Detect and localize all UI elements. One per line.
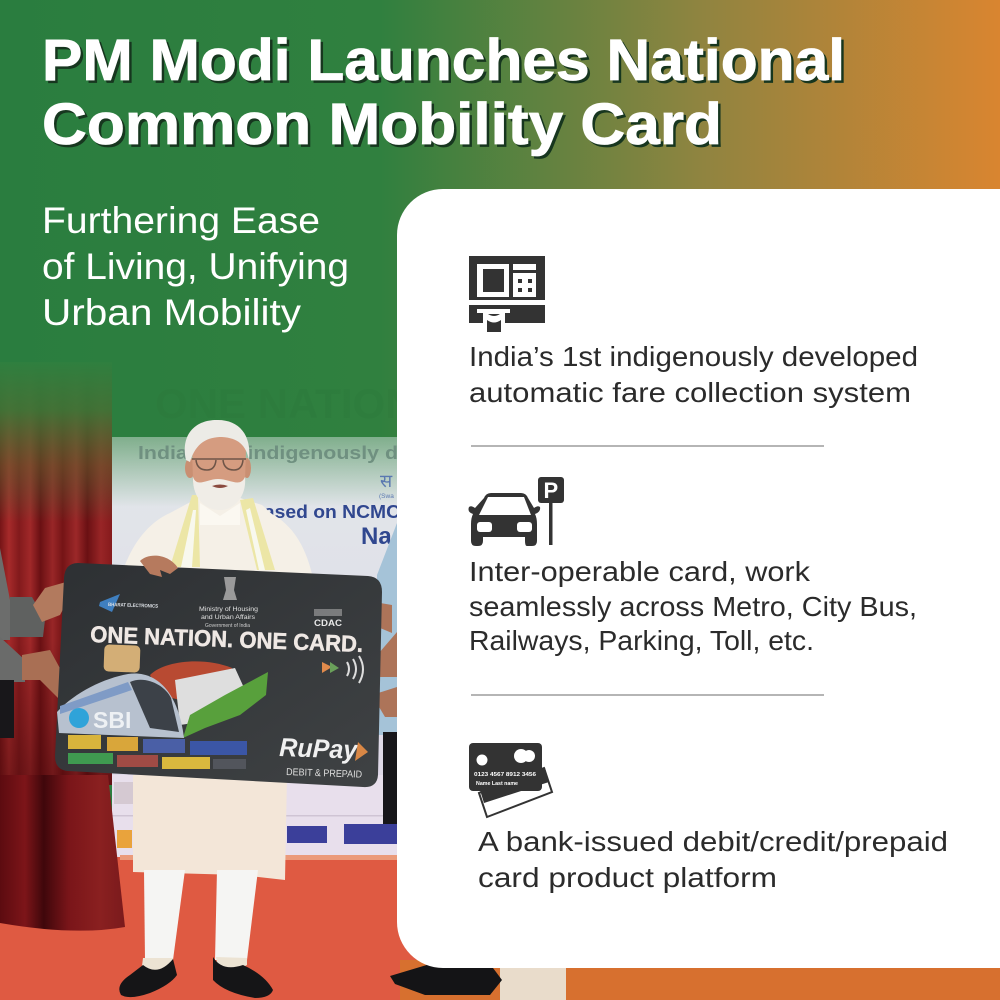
ministry text: Ministry of Housing: [199, 606, 258, 613]
stage backdrop: Na: [361, 523, 392, 550]
icon: bank cards: Name Last name: [476, 781, 518, 787]
title: [42, 28, 848, 160]
right leg: [215, 870, 258, 960]
CDAC logo: CDAC: [314, 618, 342, 629]
stage backdrop: [112, 437, 412, 867]
chip: [104, 644, 140, 673]
PM figure: [119, 420, 312, 998]
panel: key features: [397, 189, 1000, 968]
collar: [200, 503, 240, 525]
left person: [0, 548, 68, 738]
icon: bank cards: 0123 4567 8912 3456: [474, 772, 536, 778]
text: second feature: Railways, Parking, Toll, etc.: [469, 625, 814, 656]
bank logos: [68, 735, 247, 769]
glasses: [192, 459, 246, 470]
title: Common Mobility Card: [44, 94, 724, 160]
left leg: [144, 870, 185, 960]
icon: fare collection machine: [469, 256, 545, 332]
ears: [185, 458, 195, 478]
CDAC logo: [314, 609, 342, 629]
title: PM Modi Launches National: [44, 30, 848, 96]
dark shoes at panel edge: [390, 964, 502, 995]
SBI: [69, 708, 89, 728]
red carpet: [0, 857, 1000, 1000]
right person: [372, 523, 397, 824]
subtitle: of Living, Unifying: [42, 246, 349, 287]
National Common Mobility Card replica: DEBIT & PREPAID: [286, 767, 362, 781]
right shoe: [213, 957, 273, 998]
National Common Mobility Card replica: and Urban Affairs: [201, 614, 256, 621]
stole right: [240, 498, 275, 570]
red curtain lower: [0, 775, 125, 931]
face: [192, 428, 246, 508]
subtitle: [42, 200, 349, 333]
National Common Mobility Card replica: Government of India: [205, 623, 250, 629]
stole left: [170, 495, 200, 567]
National Common Mobility Card replica: BHARAT ELECTRONICS: [108, 602, 159, 610]
text: first feature: automatic fare collection system: [469, 377, 911, 408]
stage backdrop: Based on NCMC: [250, 502, 400, 522]
subtitle: Furthering Ease: [42, 200, 320, 241]
icon: bank cards: [469, 743, 552, 817]
left shoe: [119, 959, 177, 997]
flag splash art: [150, 661, 232, 700]
icon: car and parking sign: P: [544, 478, 558, 503]
kurta upper body: [125, 498, 312, 600]
event photo: [0, 362, 1000, 1000]
stage backdrop: India's 1st indigenously d: [138, 443, 398, 463]
text: second feature: seamlessly across Metro, City Bus,: [469, 591, 917, 622]
text: third feature: card product platform: [478, 862, 777, 893]
kurta lower: [133, 775, 287, 880]
text: third feature: [478, 826, 948, 893]
icon: car and parking sign: [468, 477, 564, 546]
emblem: [223, 577, 237, 600]
bottom carpet strip, right: [400, 960, 1000, 1000]
contactless icon: [322, 662, 332, 673]
text: first feature: India’s 1st indigenously developed: [469, 341, 918, 372]
title: PM Modi Launches National: [42, 28, 845, 93]
text: first feature: [469, 341, 918, 408]
mouth: [212, 484, 228, 488]
stage backdrop: स: [380, 471, 393, 491]
green fade over curtain: [0, 362, 112, 522]
issuer logo: [99, 594, 120, 612]
stage backdrop: (Swa: [379, 493, 394, 500]
card headline: ONE NATION. ONE CARD.: [90, 621, 364, 657]
socks: [142, 957, 247, 974]
title: Common Mobility Card: [42, 92, 722, 157]
panel background: [397, 189, 1000, 968]
metro train: [57, 674, 184, 738]
red curtain upper: [0, 365, 112, 785]
National Common Mobility Card replica: SBI: [93, 707, 131, 733]
subtitle: Urban Mobility: [42, 292, 302, 333]
text: second feature: Inter-operable card, work: [469, 556, 811, 587]
beard: [193, 477, 245, 510]
PM hand on card: [140, 556, 178, 577]
text: third feature: A bank-issued debit/credit/prepaid: [478, 826, 948, 857]
National Common Mobility Card replica: [55, 563, 382, 787]
text: second feature: [469, 556, 917, 656]
hair: [185, 420, 249, 462]
card body: [55, 563, 382, 787]
RuPay logo: RuPay: [279, 732, 359, 765]
faint ghost headline: ONE NATION: [155, 380, 416, 427]
